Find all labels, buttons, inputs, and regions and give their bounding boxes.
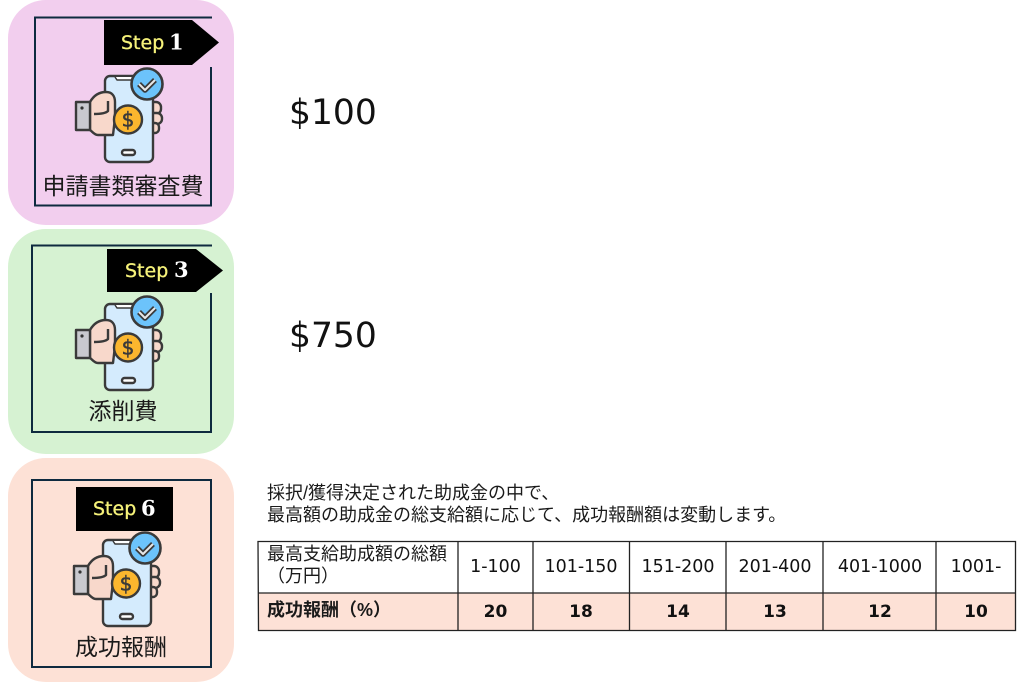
tag: step 1: Step xyxy=(121,32,164,54)
table header row: 最高支給助成額の総額 xyxy=(267,544,447,564)
icon: phone payment step 1: $ xyxy=(122,108,134,132)
icon: phone payment step 6 xyxy=(74,532,160,626)
table values row: 成功報酬（%） xyxy=(267,599,391,620)
text block: success fee explanation: 採択/獲得決定された助成金の中で、 xyxy=(267,483,559,503)
table header row: 401-1000 xyxy=(838,557,922,577)
text block: success fee explanation: 最高額の助成金の総支給額に応じて、成功報酬額は変動します。 xyxy=(267,505,786,525)
icon: phone payment step 6: $ xyxy=(120,572,132,596)
tag: step 3 xyxy=(107,249,223,292)
table values row: 14 xyxy=(666,602,690,622)
table values row: 20 xyxy=(484,602,507,622)
tag: step 6 xyxy=(76,487,173,531)
table header row: 1001- xyxy=(951,557,1001,577)
table values row: 18 xyxy=(569,602,593,622)
table values row: 10 xyxy=(964,602,988,622)
table: success fee rates xyxy=(258,541,1016,631)
label: step 3: 添削費 xyxy=(88,398,158,424)
icon: phone payment step 3: $ xyxy=(122,336,134,360)
table header row: （万円） xyxy=(267,566,339,586)
label: step 6: 成功報酬 xyxy=(75,634,167,660)
table header row: 151-200 xyxy=(641,557,715,577)
label: step 1: 申請書類審査費 xyxy=(42,173,204,199)
table header row: 1-100 xyxy=(470,557,521,577)
panel: step 3 correction fee xyxy=(8,229,234,454)
amount: step 3: $750 xyxy=(289,316,377,356)
panel: step 6 success fee xyxy=(8,458,234,682)
tag: step 6: 6 xyxy=(141,496,156,520)
frame: step 6 xyxy=(32,480,211,667)
frame: step 3 xyxy=(32,246,212,432)
panel: step 1 application review fee xyxy=(8,0,234,225)
text block: success fee explanation xyxy=(267,483,786,525)
table values row xyxy=(267,599,988,622)
tag: step 3: Step xyxy=(125,260,168,282)
table values row: 13 xyxy=(763,602,787,622)
table header row xyxy=(267,544,1001,586)
tag: step 3: 3 xyxy=(174,257,189,282)
tag: step 1: 1 xyxy=(169,30,184,54)
table values row: 12 xyxy=(868,602,892,622)
icon: phone payment step 1 xyxy=(76,68,162,162)
icon: phone payment step 3 xyxy=(76,296,162,390)
frame: step 1 xyxy=(35,18,212,206)
tag: step 6: Step xyxy=(93,498,136,520)
tag: step 1 xyxy=(104,20,219,65)
amount: step 1: $100 xyxy=(289,93,377,133)
table header row: 101-150 xyxy=(544,557,618,577)
table header row: 201-400 xyxy=(738,557,812,577)
